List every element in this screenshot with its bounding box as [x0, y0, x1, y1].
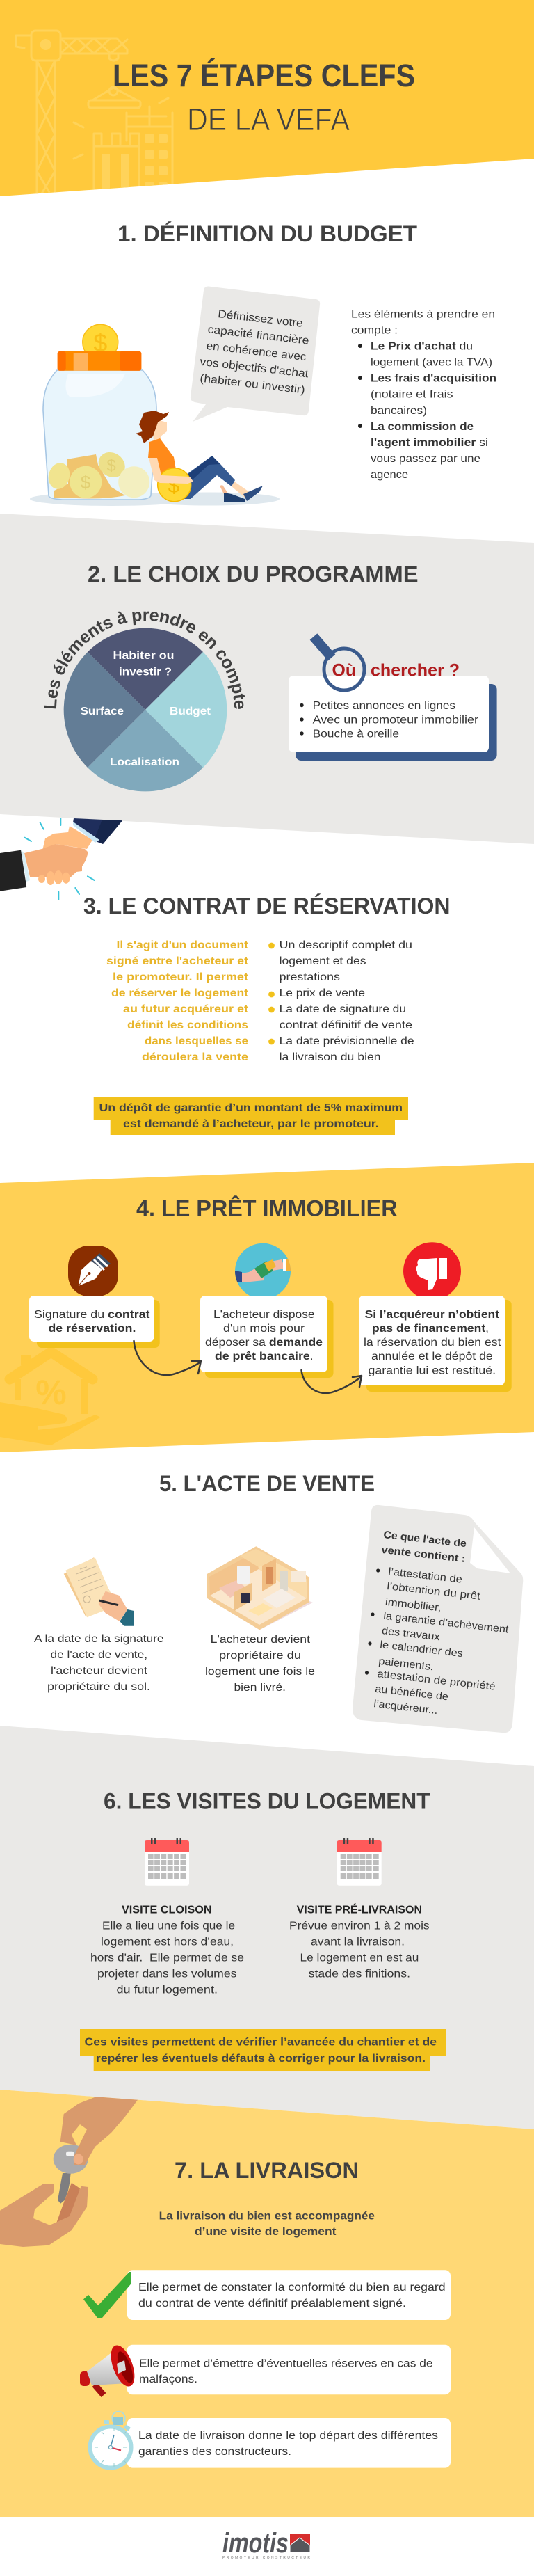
card: no financing: annulée et le dépôt de [371, 1351, 493, 1362]
icon: calendar left [145, 1838, 189, 1886]
card: loan application: de prêt bancaire . [215, 1351, 314, 1362]
card: loan application: déposer sa demande [205, 1337, 323, 1349]
text block: land ownership: de l'acte de vente, [50, 1649, 147, 1661]
card: signature: Signature du contrat [34, 1309, 150, 1321]
document: deed contents: paiements. [378, 1655, 434, 1673]
document: deed contents: des travaux [381, 1625, 441, 1643]
list: contract contents: logement et des [280, 955, 366, 967]
text block: visite cloison: Elle a lieu une fois que le [102, 1921, 235, 1932]
text block: budget elements list: La commission de [371, 421, 474, 433]
document: deed contents: vente contient : [381, 1544, 466, 1565]
text block: budget elements list: compte : [351, 324, 398, 337]
text block: budget elements list: (notaire et frais [371, 389, 453, 401]
text block: housing ownership: bien livré. [234, 1682, 286, 1694]
card: conformity: Elle permet de constater la conformité du bien au regard [138, 2282, 446, 2293]
chart: four-part pie: Localisation [110, 756, 179, 768]
text block: land ownership: A la date de la signature [34, 1633, 164, 1645]
watermark: house and hand [0, 1352, 100, 1445]
document: deed contents: l’acquéreur... [373, 1698, 438, 1717]
list: contract contents: La date de signature du [280, 1003, 406, 1015]
icon: money exchange [235, 1243, 291, 1299]
arrow: step 2 to step 3 [302, 1370, 362, 1393]
chart: four-part pie: investir ? [119, 667, 172, 678]
text block: visite cloison: logement est hors d’eau, [101, 1937, 234, 1948]
arrow: step 1 to step 2 [134, 1341, 201, 1375]
illustration: hands and key [0, 2097, 138, 2247]
icon: check mark [83, 2272, 131, 2318]
list: contract contents [268, 939, 414, 1063]
jar body [43, 370, 156, 500]
chart: four-part pie [64, 628, 227, 791]
text block: budget elements list: Le Prix d'achat du [371, 341, 473, 353]
coin entering jar: $ [93, 328, 107, 357]
watermark: house and hand: % [35, 1373, 67, 1412]
coins in jar: $ [81, 472, 91, 493]
heading: section 5: 5. L'ACTE DE VENTE [159, 1471, 375, 1496]
text block: definition of the contract: déroulera la vente [142, 1051, 248, 1063]
heading: où chercher: Où [332, 661, 356, 681]
heading: où chercher: chercher ? [371, 661, 460, 681]
text block: definition of the contract: de réserver le logement [111, 987, 249, 999]
chart: four-part pie: Budget [170, 706, 211, 717]
text block: definition of the contract [106, 939, 249, 1063]
card: no financing: Si l’acquéreur n’obtient [365, 1309, 500, 1321]
card: conformity [127, 2270, 451, 2320]
text block: definition of the contract: Il s'agit d'un document [117, 939, 249, 951]
text block: definition of the contract: dans lesquelles se [145, 1035, 248, 1047]
heading: section 4: 4. LE PRÊT IMMOBILIER [136, 1196, 398, 1221]
text block: intro: d’une visite de logement [195, 2226, 337, 2238]
heading: section 6: 6. LES VISITES DU LOGEMENT [104, 1788, 430, 1813]
document: deed contents: Ce que l'acte de [383, 1529, 467, 1550]
text block: visite cloison: projeter dans les volumes [97, 1969, 236, 1980]
list: contract contents: prestations [280, 971, 340, 983]
card: loan application [200, 1296, 334, 1378]
callout: purpose of visits [80, 2029, 446, 2071]
text block: housing ownership [205, 1634, 315, 1694]
callout: deposit: Un dépôt de garantie d’un montant de 5% maximum [99, 1102, 403, 1114]
coins in jar [46, 447, 149, 498]
icon: calendar right [337, 1838, 382, 1886]
card: warranties [127, 2418, 451, 2468]
text block: land ownership: l'acheteur devient [51, 1665, 148, 1677]
card: warranties: garanties des constructeurs. [138, 2446, 291, 2458]
text block: housing ownership: L'acheteur devient [211, 1634, 311, 1646]
card: reservations [127, 2345, 451, 2394]
speech bubble: en cohérence avec [206, 340, 307, 363]
speech bubble: vos objectifs d'achat [200, 356, 309, 380]
card: reservations: Elle permet d’émettre d’éventuelles réserves en cas de [139, 2358, 433, 2370]
callout: deposit [94, 1097, 408, 1135]
card: no financing: pas de financement , [372, 1323, 489, 1335]
card: no financing [359, 1296, 512, 1392]
card: loan application: L'acheteur dispose [213, 1309, 315, 1321]
heading: section 3: 3. LE CONTRAT DE RÉSERVATION [83, 893, 450, 919]
text block: land ownership: propriétaire du sol. [47, 1681, 150, 1693]
text block: visite pré-livraison: Prévue environ 1 à 2 mois [289, 1921, 430, 1932]
woman sitting [136, 411, 263, 502]
speech bubble: (habiter ou investir) [200, 372, 305, 397]
speech bubble: Définissez votre [217, 308, 304, 330]
document: deed contents [353, 1505, 523, 1733]
heading: section 2: 2. LE CHOIX DU PROGRAMME [88, 562, 419, 587]
icon: magnifier [314, 637, 364, 690]
illustration: handshake [0, 818, 122, 900]
illustration: isometric apartment [207, 1546, 313, 1630]
heading: section 7: 7. LA LIVRAISON [175, 2158, 359, 2183]
list: contract contents: La date prévisionnelle de [280, 1035, 414, 1047]
text block: budget elements list: vous passez par une [371, 453, 480, 465]
text block: visite pré-livraison: stade des finitions. [309, 1969, 410, 1980]
card: no financing: la réservation du bien est [364, 1337, 501, 1349]
text block: visite pré-livraison: VISITE PRÉ-LIVRAISON [297, 1903, 422, 1916]
woman sitting: $ [168, 475, 180, 498]
panel: section 4 background [0, 1163, 534, 1452]
document: deed contents: l’obtention du prêt [387, 1580, 482, 1603]
text block: visite cloison: VISITE CLOISON [122, 1905, 212, 1916]
document: deed contents: au bénéfice de [375, 1683, 449, 1703]
document: deed contents: immobilier, [385, 1596, 442, 1614]
card: loan application: d'un mois pour [223, 1323, 305, 1335]
illustration: crane and buildings watermark [16, 31, 172, 202]
document: deed contents: le calendrier des [380, 1639, 464, 1660]
speech bubble: capacité financière [207, 324, 309, 347]
card: signature [29, 1296, 160, 1348]
list: contract contents: la livraison du bien [280, 1051, 381, 1063]
illustration: jar and woman [30, 324, 280, 506]
logo: imotis: imotis [222, 2528, 289, 2559]
list: contract contents: Le prix de vente [280, 987, 365, 999]
text block: land ownership [34, 1633, 164, 1693]
panel: où chercher [289, 637, 497, 761]
text block: definition of the contract: le promoteur. Il permet [113, 971, 249, 983]
panel: où chercher: Avec un promoteur immobilier [313, 714, 479, 726]
text block: budget elements list: l'agent immobilier si [371, 437, 488, 449]
text block: budget elements list: Les éléments à prendre en [351, 309, 495, 320]
curved caption: Les éléments à prendre en compte [44, 611, 245, 709]
card: warranties: La date de livraison donne le top départ des différentes [138, 2430, 438, 2442]
callout: purpose of visits: repérer les éventuels défauts à corriger pour la livraison. [96, 2053, 426, 2065]
text block: visite cloison: hors d'air. Elle permet de se [90, 1953, 244, 1964]
text block: budget elements list [351, 309, 496, 481]
text block: definition of the contract: au futur acquéreur et [123, 1003, 249, 1015]
document: deed contents: attestation de propriété [377, 1668, 496, 1693]
text block: visite pré-livraison [289, 1903, 430, 1980]
text block: definition of the contract: signé entre l'acheteur et [106, 955, 249, 967]
text block: housing ownership: logement une fois le [205, 1666, 315, 1678]
text block: visite pré-livraison: Le logement en est au [300, 1953, 419, 1964]
panel: section 2 background [0, 514, 534, 844]
heading: section 1: 1. DÉFINITION DU BUDGET [118, 221, 417, 246]
text block: definition of the contract: définit les conditions [127, 1019, 248, 1031]
callout: deposit: est demandé à l’acheteur, par le promoteur. [123, 1118, 379, 1130]
list: contract contents: Un descriptif complet du [280, 939, 412, 951]
illustration: signing document [64, 1557, 134, 1626]
document: deed contents: l’attestation de [388, 1566, 463, 1586]
list: contract contents: contrat définitif de vente [280, 1019, 412, 1031]
text block: budget elements list: bancaires) [371, 405, 427, 417]
chart: four-part pie: Surface [81, 706, 124, 717]
panel: header [0, 0, 534, 202]
icon: stopwatch [90, 2412, 131, 2467]
callout: purpose of visits: Ces visites permettent de vérifier l’avancée du chantier et de [85, 2037, 437, 2049]
chart: four-part pie: Habiter ou [113, 650, 174, 662]
title [113, 58, 415, 137]
heading: où chercher [332, 661, 460, 681]
coin entering jar [83, 324, 118, 360]
logo: imotis: PROMOTEUR CONSTRUCTEUR [222, 2556, 310, 2560]
card: no financing: garantie lui est restitué. [369, 1365, 496, 1377]
icon: thumbs down [403, 1242, 461, 1300]
speech bubble [191, 286, 320, 422]
card: signature: de réservation. [49, 1323, 136, 1335]
title: LES 7 ÉTAPES CLEFS [113, 58, 415, 93]
icon: megaphone [80, 2342, 139, 2395]
card: reservations: malfaçons. [139, 2374, 197, 2385]
text block: visite pré-livraison: avant la livraison. [311, 1937, 405, 1948]
text block: intro [159, 2210, 375, 2238]
icon: pen nib [68, 1246, 118, 1296]
panel: section 6 background [0, 1726, 534, 2129]
title: DE LA VEFA [187, 102, 350, 137]
jar lid [58, 351, 141, 371]
document: deed contents: la garantie d’achèvement [383, 1610, 510, 1636]
text block: intro: La livraison du bien est accompagnée [159, 2210, 375, 2222]
text block: housing ownership: propriétaire du [219, 1650, 301, 1662]
text block: budget elements list: agence [371, 469, 408, 481]
coins in jar: $ [106, 456, 116, 475]
card: conformity: du contrat de vente définitif préalablement signé. [138, 2298, 406, 2309]
panel: section 7 background [0, 2090, 534, 2517]
text block: budget elements list: logement (avec la TVA) [371, 357, 492, 369]
text block: visite cloison [90, 1905, 244, 1996]
text block: visite cloison: du futur logement. [117, 1985, 218, 1996]
panel: où chercher: Petites annonces en lignes [313, 700, 455, 712]
text block: budget elements list: Les frais d'acquisition [371, 373, 496, 385]
panel: où chercher: Bouche à oreille [313, 728, 399, 740]
